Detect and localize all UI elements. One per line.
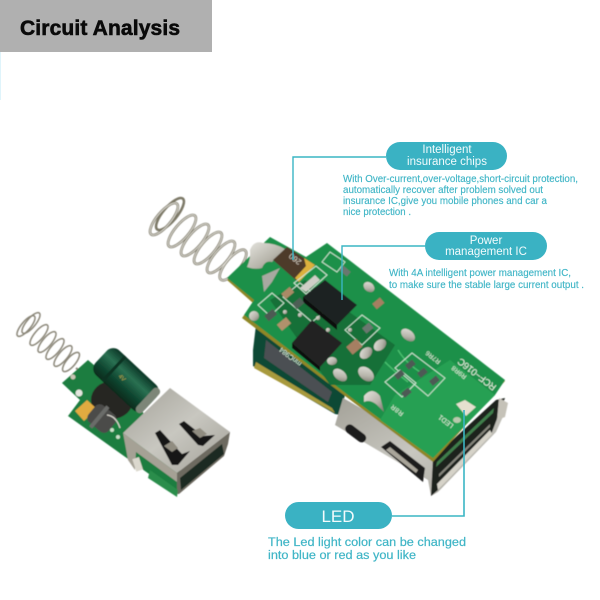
small spring	[14, 310, 82, 374]
board silk labels: LED1	[437, 413, 455, 429]
photo: small charger board	[14, 310, 230, 497]
text: LED description: The Led light color can be changed	[268, 535, 466, 549]
callout: power management IC	[425, 232, 547, 260]
solder pads	[249, 280, 417, 412]
text: insurance chips description: insurance IC,give you mobile phones and car a	[343, 196, 547, 207]
small capacitor: 4V	[117, 374, 126, 383]
callout: power management IC: Power	[470, 235, 502, 247]
board silk labels: R9R8	[450, 364, 468, 380]
text: power management description: With 4A intelligent power management IC,	[389, 268, 571, 279]
callout: power management IC: management IC	[445, 246, 527, 258]
callout: LED: LED	[321, 507, 355, 526]
leader line: power management	[342, 246, 425, 300]
small USB socket	[123, 388, 230, 473]
silk outlines	[258, 252, 445, 397]
white pad outlines	[294, 266, 327, 294]
fuse chip	[273, 247, 315, 282]
text: insurance chips description: automatically recover after problem solved out	[343, 185, 543, 196]
text: insurance chips description: With Over-current,over-voltage,short-circuit protection,	[343, 174, 578, 185]
text: insurance chips description	[343, 174, 578, 218]
photo: large charger board	[146, 194, 508, 496]
leader line: LED	[392, 410, 464, 516]
small choke	[83, 400, 120, 438]
callout: intelligent insurance chips: Intelligent	[422, 144, 472, 156]
board silk labels: R7R6	[424, 349, 442, 365]
small PCB	[62, 360, 180, 494]
small tantalum capacitor	[75, 400, 97, 421]
large spring	[146, 194, 251, 284]
callout: intelligent insurance chips: insurance chips	[407, 156, 487, 168]
text: LED description	[268, 535, 466, 562]
small components	[264, 265, 440, 398]
text: LED description: into blue or red as you like	[268, 548, 416, 562]
text: power management description	[389, 268, 584, 291]
large USB socket	[335, 398, 506, 496]
board silk labels: R8R	[390, 403, 405, 417]
board silk labels: RCF−016C	[456, 355, 499, 392]
title: Circuit Analysis	[20, 17, 180, 40]
leader line: insurance chips	[293, 157, 386, 260]
fuse chip: 260	[287, 251, 303, 267]
board silk labels: mnC984	[278, 345, 303, 367]
solder joint	[247, 242, 285, 269]
small capacitor	[90, 344, 162, 416]
small inductor	[91, 381, 133, 419]
IC: second chip	[292, 320, 342, 371]
large PCB	[227, 237, 505, 458]
IC: power management	[303, 280, 357, 330]
text: insurance chips description: nice protection .	[343, 207, 411, 218]
large PCB edge	[227, 238, 505, 462]
header banner	[0, 0, 212, 52]
LED chip	[453, 400, 476, 423]
large underside capacitor	[253, 325, 345, 415]
text: power management description: to make sure the stable large current output .	[389, 280, 584, 291]
board silk labels	[278, 345, 499, 429]
callout: intelligent insurance chips	[386, 142, 507, 170]
callout: LED	[285, 502, 392, 529]
